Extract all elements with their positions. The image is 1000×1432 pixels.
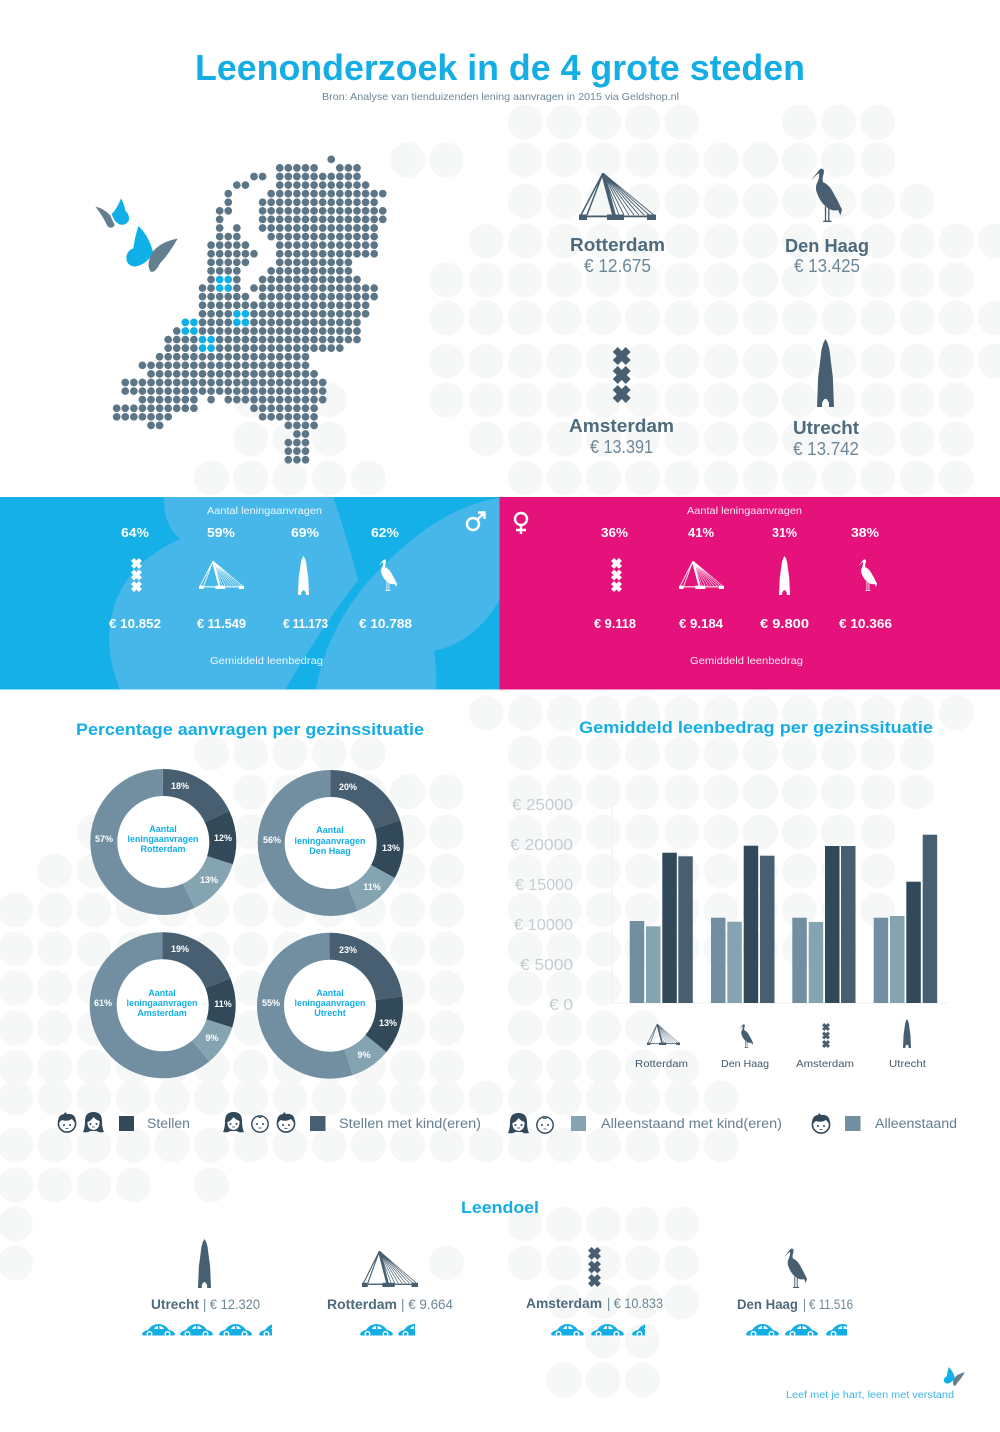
panel: men: € 10.788	[359, 616, 412, 631]
bars: Den Haag	[711, 846, 774, 1003]
panel: loan purpose Amsterdam: Amsterdam	[526, 1296, 602, 1311]
donut chart: Rotterdam: 13%	[200, 875, 218, 885]
panel: women: 38%	[851, 525, 879, 540]
y axis labels: € 25000	[512, 797, 573, 814]
legend item: couples with children	[223, 1112, 481, 1132]
panel: men: Aantal leningaanvragen	[207, 505, 322, 517]
icon: cars	[746, 1324, 859, 1337]
heading: percentage per family situation: Percentage aanvragen per gezinssituatie	[76, 720, 424, 739]
donut chart: Rotterdam: Aantal	[149, 824, 177, 834]
icon: stork	[811, 169, 842, 222]
panel: men: € 11.173	[283, 616, 328, 631]
icon: cars	[551, 1324, 665, 1337]
panel: Rotterdam average: € 12.675	[584, 256, 651, 276]
icons: city symbols in white	[133, 556, 397, 595]
title: Leenonderzoek in de 4 grote steden	[195, 47, 805, 88]
x axis icons and city labels: Den Haag	[721, 1058, 769, 1070]
icon: tower	[817, 339, 834, 407]
panel: loan purpose Rotterdam	[327, 1251, 453, 1337]
footer slogan: Leef met je hart, leen met verstand	[786, 1390, 954, 1401]
panel: loan purpose Den Haag: | € 11.516	[803, 1297, 853, 1312]
donut chart: Amsterdam: leningaanvragen	[126, 998, 198, 1008]
legend item: single with children	[508, 1113, 782, 1133]
donut chart: Den Haag: 11%	[363, 882, 381, 892]
legend item: single with children: Alleenstaand met kind(eren)	[601, 1116, 782, 1131]
panel: Amsterdam average	[569, 350, 674, 457]
icon: bridge	[579, 173, 656, 220]
donut chart: Den Haag: leningaanvragen	[294, 836, 366, 846]
donut chart: Rotterdam: leningaanvragen	[128, 834, 198, 844]
panel: men: € 11.549	[197, 616, 246, 631]
donut chart: Rotterdam: 12%	[214, 833, 232, 843]
panel: men	[0, 497, 500, 690]
icon: cars	[142, 1324, 292, 1337]
panel: Den Haag average: € 13.425	[794, 256, 860, 276]
panel: loan purpose Amsterdam: | € 10.833	[607, 1296, 663, 1311]
donut chart: Amsterdam: 9%	[205, 1033, 219, 1043]
x axis icons and city labels: Rotterdam	[635, 1058, 688, 1070]
panel: women	[500, 497, 1000, 690]
donut chart: Den Haag: Aantal	[316, 825, 344, 835]
donut chart: Amsterdam: Aantal	[148, 988, 176, 998]
panel: loan purpose Utrecht	[142, 1239, 292, 1337]
bars: Amsterdam	[792, 846, 856, 1003]
panel: men: 62%	[371, 525, 399, 540]
panel: women: € 10.366	[839, 616, 892, 631]
donut chart: Utrecht: 13%	[379, 1018, 397, 1028]
panel: Rotterdam average: Rotterdam	[570, 235, 665, 255]
panel: Den Haag average: Den Haag	[785, 236, 869, 256]
panel: loan purpose Utrecht: Utrecht	[151, 1297, 200, 1312]
donut chart: Amsterdam: 19%	[171, 944, 189, 954]
legend item: single	[812, 1113, 957, 1133]
panel: women: € 9.118	[594, 616, 636, 631]
donut chart: Utrecht	[262, 945, 397, 1065]
donut chart: Rotterdam: Rotterdam	[140, 844, 186, 854]
x axis icons and city labels: Utrecht	[889, 1058, 926, 1070]
panel: men: 59%	[207, 525, 235, 540]
icon: cars	[360, 1324, 431, 1337]
icons: city symbols in white	[613, 556, 877, 595]
panel: women: 41%	[688, 525, 714, 540]
panel: women: € 9.184	[679, 616, 724, 631]
subtitle: source: Bron: Analyse van tienduizenden lening aanvragen in 2015 via Geldshop.nl	[322, 91, 679, 103]
legend item: couples	[58, 1112, 190, 1132]
x axis icons and city labels: Amsterdam	[796, 1058, 854, 1070]
icon: male symbol	[467, 512, 484, 530]
donut chart: Utrecht: 9%	[357, 1050, 371, 1060]
donut chart: Rotterdam: 18%	[171, 781, 189, 791]
icon: three crosses	[615, 350, 628, 400]
donut chart: Utrecht: 55%	[262, 998, 280, 1008]
donut chart: Amsterdam	[94, 944, 232, 1065]
y axis labels: € 5000	[520, 957, 573, 974]
y axis labels: € 15000	[515, 877, 573, 894]
panel: loan purpose Rotterdam: | € 9.664	[401, 1297, 453, 1312]
panel: loan purpose Den Haag: Den Haag	[737, 1297, 798, 1312]
heading: average amount per family situation: Gemiddeld leenbedrag per gezinssituatie	[579, 718, 933, 737]
panel: loan purpose Rotterdam: Rotterdam	[327, 1297, 397, 1312]
panel: women: 31%	[772, 525, 797, 540]
heading: loan purpose: Leendoel	[461, 1198, 539, 1217]
panel: men: 69%	[291, 525, 319, 540]
panel: Rotterdam average	[570, 173, 665, 276]
y axis labels: € 0	[549, 997, 573, 1014]
panel: Amsterdam average: Amsterdam	[569, 416, 674, 436]
icon: footer butterfly	[944, 1367, 965, 1386]
panel: men: Gemiddeld leenbedrag	[210, 655, 323, 667]
icon: female symbol	[515, 513, 527, 534]
legend item: couples: Stellen	[147, 1116, 190, 1131]
panel: women: Aantal leningaanvragen	[687, 505, 802, 517]
bars: Rotterdam	[630, 853, 693, 1003]
y axis labels: € 20000	[510, 837, 573, 854]
panel: loan purpose Amsterdam	[526, 1249, 665, 1337]
donut chart: Rotterdam	[95, 781, 232, 902]
donut chart: Utrecht: Aantal	[316, 988, 344, 998]
icon: butterflies	[95, 198, 178, 272]
donut chart: Utrecht: Utrecht	[314, 1008, 346, 1018]
panel: loan purpose Utrecht: | € 12.320	[203, 1297, 260, 1312]
donut chart: Amsterdam: 61%	[94, 998, 112, 1008]
map of the Netherlands in dots	[117, 159, 383, 460]
y axis labels	[510, 797, 573, 1014]
bars: Utrecht	[874, 835, 937, 1003]
donut chart: Den Haag: 20%	[339, 782, 357, 792]
panel: Utrecht average: Utrecht	[793, 418, 859, 438]
panel: men: 64%	[121, 525, 149, 540]
panel: women: 36%	[601, 525, 628, 540]
panel: men: € 10.852	[109, 616, 161, 631]
y axis labels: € 10000	[514, 917, 573, 934]
donut chart: Rotterdam: 57%	[95, 834, 113, 844]
bar chart: average loan per family situation	[510, 797, 947, 1070]
donut chart: Amsterdam: Amsterdam	[137, 1008, 187, 1018]
donut chart: Den Haag: 13%	[382, 843, 400, 853]
legend: family situations	[58, 1112, 957, 1133]
panel: women: Gemiddeld leenbedrag	[690, 655, 803, 667]
donut chart: Den Haag	[263, 782, 400, 902]
legend item: single: Alleenstaand	[875, 1116, 957, 1131]
panel: Amsterdam average: € 13.391	[590, 437, 653, 457]
panel: loan purpose Den Haag	[737, 1248, 859, 1337]
donut chart: Utrecht: 23%	[339, 945, 357, 955]
donut chart: Den Haag: Den Haag	[309, 846, 351, 856]
donut chart: Den Haag: 56%	[263, 835, 281, 845]
x axis icons and city labels	[635, 1019, 926, 1070]
donut chart: Utrecht: leningaanvragen	[294, 998, 366, 1008]
panel: Den Haag average	[785, 169, 869, 276]
panel: women: € 9.800	[760, 616, 809, 631]
panel: Utrecht average	[793, 339, 859, 459]
donut chart: Amsterdam: 11%	[214, 999, 232, 1009]
panel: Utrecht average: € 13.742	[793, 439, 859, 459]
legend item: couples with children: Stellen met kind(eren)	[339, 1116, 481, 1131]
